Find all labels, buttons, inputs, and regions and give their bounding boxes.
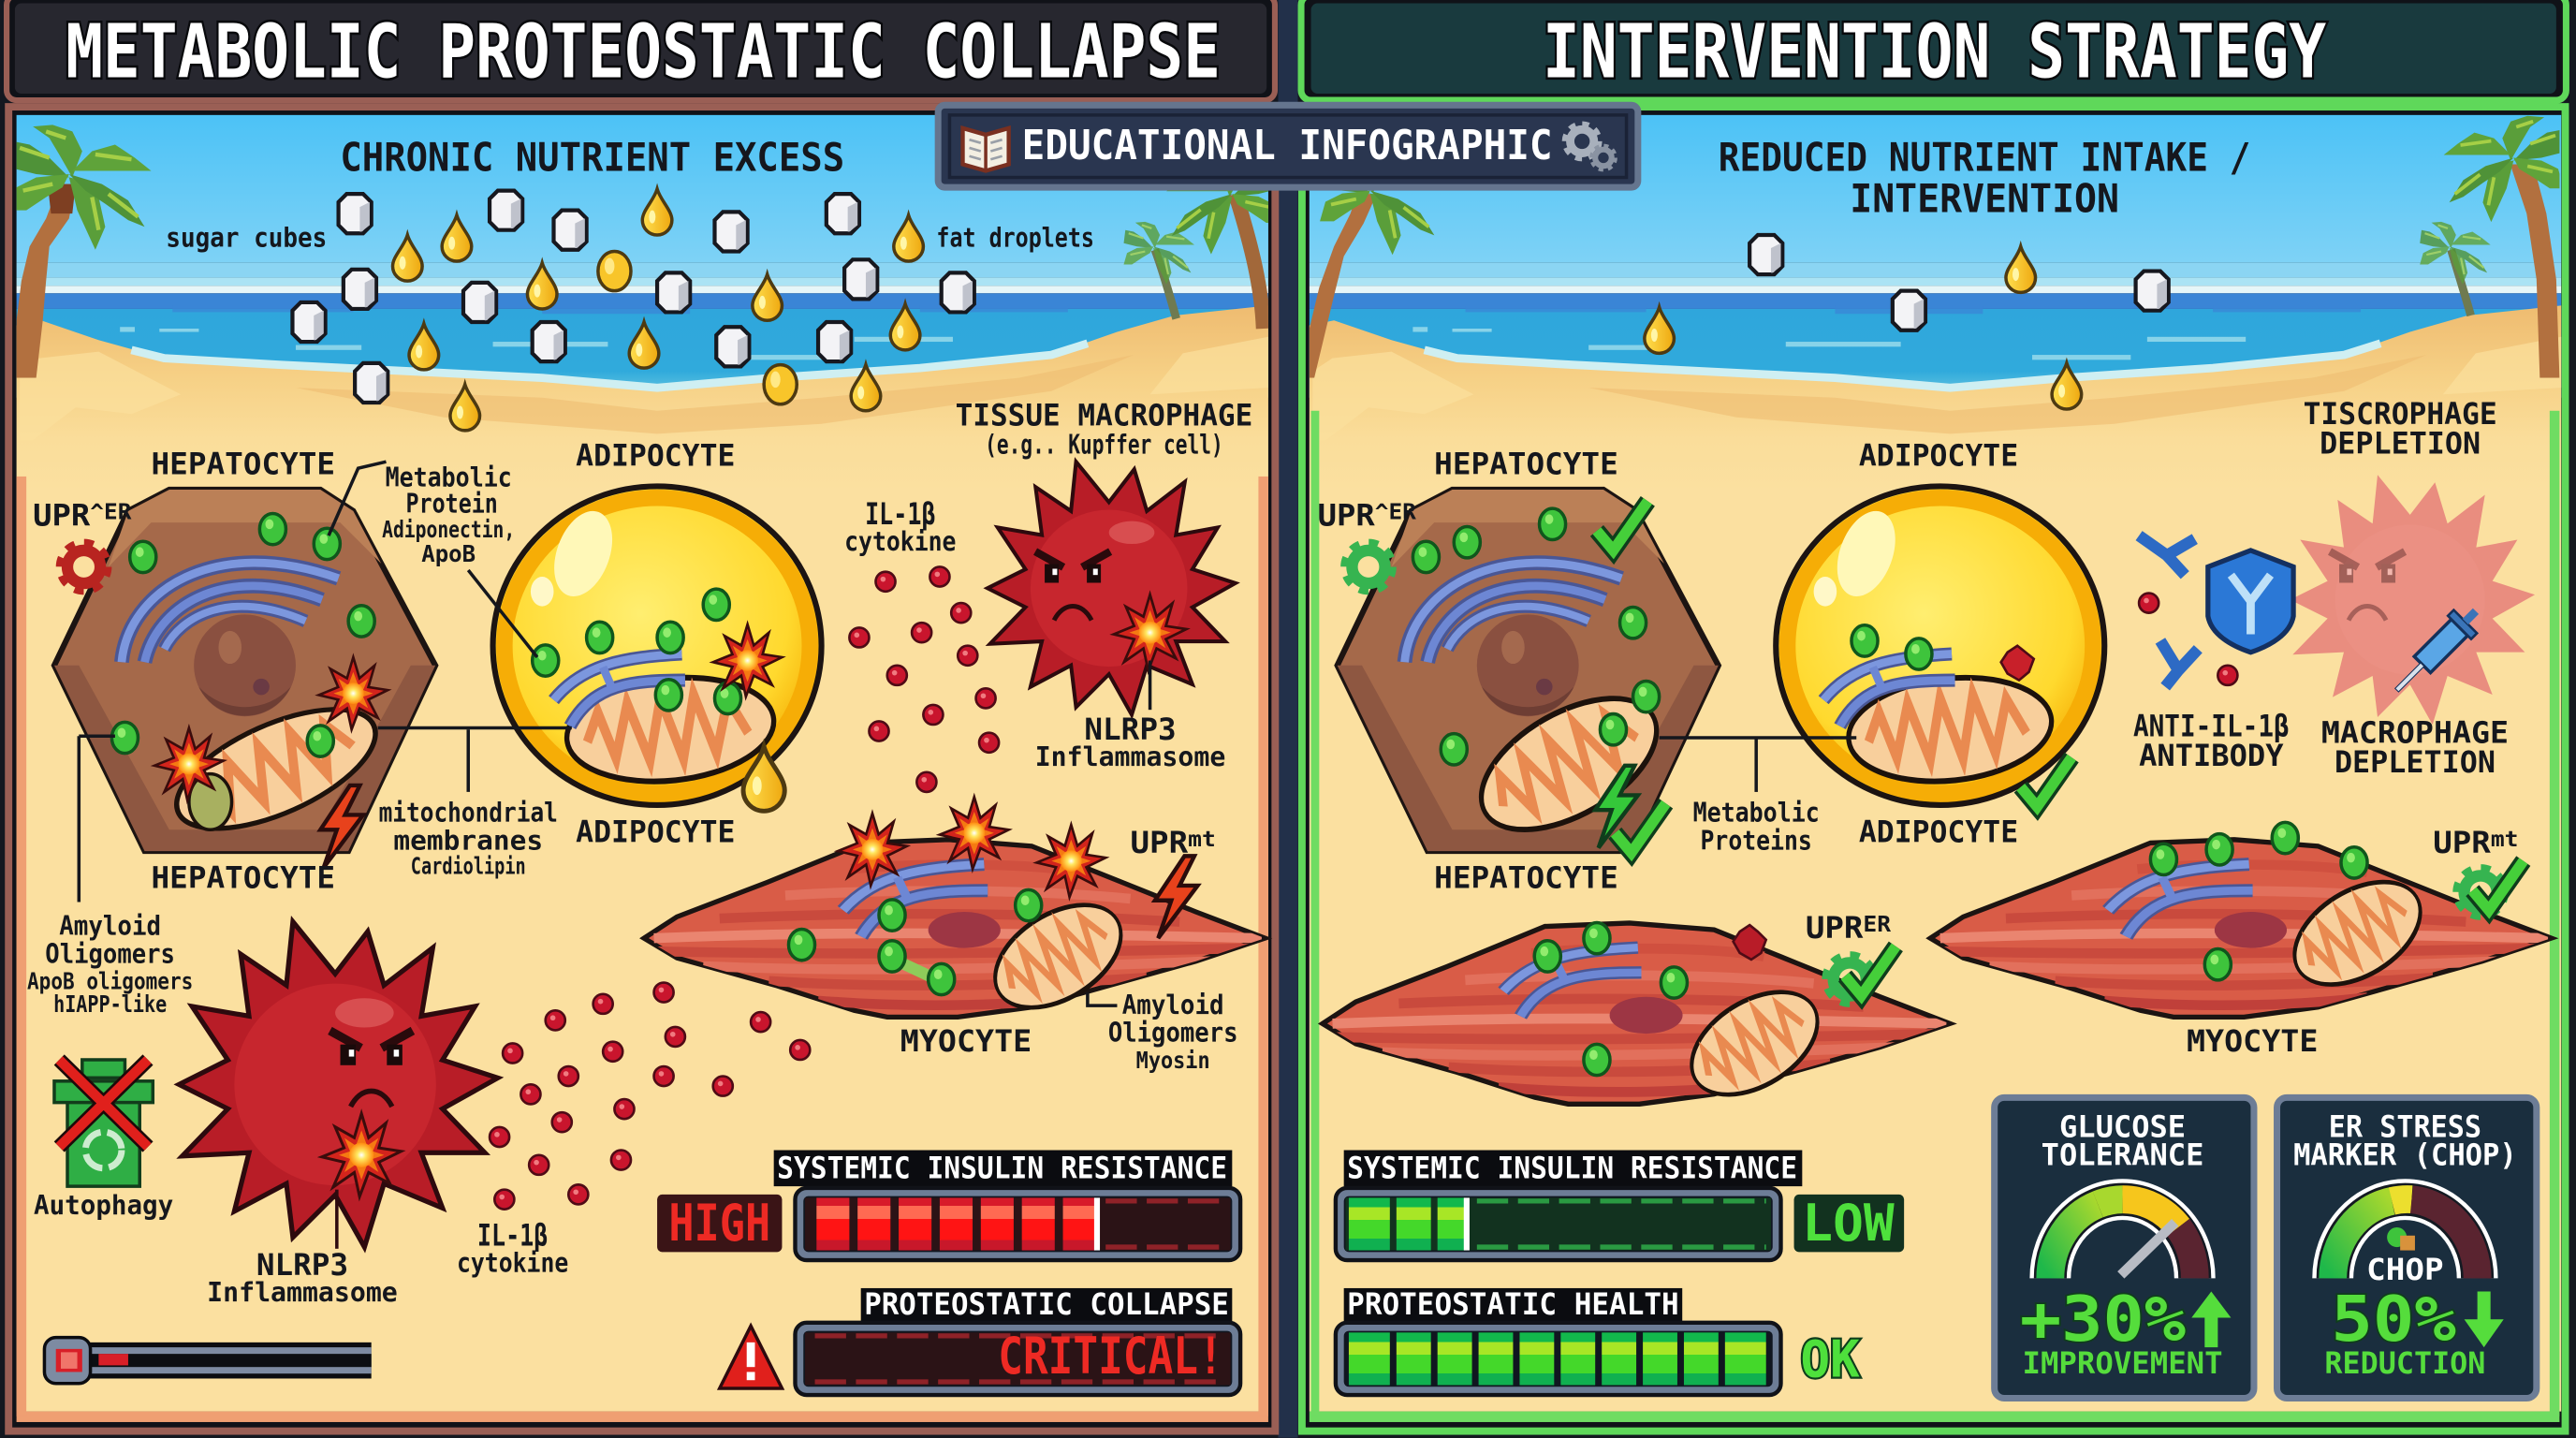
label: UPR ER lower: ER: [1863, 913, 1891, 937]
title: metabolic proteostatic collapse: METABOLIC PROTEOSTATIC COLLAPSE: [66, 8, 1221, 95]
bar: proteostatic collapse critical: [795, 1323, 1240, 1395]
label: NLRP3 inflammasome upper: Inflammasome: [1035, 741, 1225, 772]
icon: antibody shield: [2208, 550, 2293, 653]
fat droplets: [393, 189, 923, 431]
cell: myocyte (stressed): [644, 797, 1265, 1029]
label: metabolic proteins: Metabolic: [1693, 798, 1820, 829]
title bar right: [1301, 0, 2566, 100]
label: tissue macrophage: (e.g.. Kupffer cell): [985, 429, 1223, 460]
label: NLRP3 inflammasome lower: NLRP3: [256, 1249, 348, 1283]
label: reduction: REDUCTION: [2324, 1347, 2485, 1381]
cell: tissue macrophage: [988, 462, 1236, 714]
label: macrophage depletion: MACROPHAGE: [2321, 716, 2509, 750]
sugar cubes reduced: [1749, 235, 2169, 330]
label: amyloid oligomers: [27, 911, 193, 1018]
heading: reduced nutrient intake: [1719, 135, 2250, 221]
label: adipocyte bottom right: ADIPOCYTE: [1859, 815, 2018, 849]
cell: hepatocyte (stressed): [54, 490, 435, 868]
card: ER stress marker: [2277, 1097, 2537, 1399]
label: IL-1 beta cytokine lower: [457, 1219, 568, 1278]
label: UPR ER: ^ER: [90, 501, 132, 525]
label: amyloid oligomers myosin: Amyloid: [1122, 990, 1224, 1020]
label: metabolic protein: Metabolic: [386, 462, 512, 492]
sugar cubes: [292, 191, 974, 403]
value: +30%: +30%: [2020, 1283, 2186, 1356]
label: myocyte: MYOCYTE: [900, 1025, 1032, 1059]
cell: adipocyte (stressed): [493, 486, 822, 811]
heading: chronic nutrient excess: CHRONIC NUTRIENT EXCESS: [340, 135, 844, 181]
card title: GLUCOSE: [2059, 1110, 2186, 1144]
label: IL-1 beta cytokine lower: IL-1β: [477, 1219, 548, 1253]
label: mitochondrial membranes: mitochondrial: [379, 798, 558, 829]
cytokines neutralised: [2139, 594, 2237, 685]
icon: chop protein: [2387, 1227, 2415, 1251]
icon: autophagy bin crossed out: [54, 1060, 153, 1186]
tag: systemic insulin resistance high: SYSTEMIC INSULIN RESISTANCE: [777, 1152, 1227, 1185]
gauge: [2050, 1199, 2195, 1278]
heading: reduced nutrient intake: INTERVENTION: [1850, 175, 2119, 221]
label: macrophage depletion top: DEPLETION: [2320, 427, 2481, 461]
label: hepatocyte bottom right: HEPATOCYTE: [1434, 862, 1618, 896]
label: amyloid oligomers: hIAPP-like: [53, 990, 167, 1018]
title bar left: [7, 0, 1275, 100]
label: hepatocyte top: HEPATOCYTE: [152, 448, 335, 481]
label: metabolic protein: ApoB: [421, 540, 476, 567]
label: educational infographic: EDUCATIONAL INFOGRAPHIC: [1022, 122, 1553, 169]
badge: low: LOW: [1802, 1194, 1895, 1253]
card title: [2042, 1110, 2203, 1172]
badge: high: HIGH: [668, 1194, 770, 1253]
icon: green gear: [1345, 544, 1392, 590]
label: NLRP3 inflammasome upper: NLRP3: [1084, 713, 1177, 747]
label: autophagy: Autophagy: [34, 1190, 173, 1221]
label: sugar cubes: sugar cubes: [166, 222, 327, 253]
icon: book: [963, 128, 1009, 171]
panel: metabolic proteostatic collapse: [8, 107, 1280, 1431]
cell: myocyte upper (healed): [1930, 822, 2552, 1017]
label: UPR mt right: mt: [2491, 828, 2519, 852]
label: NLRP3 inflammasome lower: [207, 1249, 398, 1308]
card title: MARKER (CHOP): [2293, 1138, 2517, 1172]
small loading bar: [44, 1338, 372, 1384]
label: myocyte right: MYOCYTE: [2187, 1025, 2318, 1059]
cell: large macrophage: [179, 922, 498, 1249]
label: fat droplets: fat droplets: [936, 222, 1094, 253]
label: UPR ER right: UPR: [1318, 500, 1371, 534]
icon: warning triangle: [720, 1326, 782, 1388]
label: ok: OK: [1801, 1330, 1860, 1389]
label: amyloid oligomers myosin: Myosin: [1136, 1047, 1210, 1074]
label: tissue macrophage: [956, 400, 1252, 460]
bar: insulin resistance high: [795, 1188, 1240, 1260]
bar: proteostatic health: [1336, 1323, 1781, 1395]
label: improvement: IMPROVEMENT: [2022, 1347, 2223, 1381]
label: tissue macrophage: TISSUE MACROPHAGE: [956, 400, 1252, 433]
value: 50%: 50%: [2331, 1283, 2456, 1356]
card title: ER STRESS: [2329, 1110, 2481, 1144]
palm trees left: [10, 125, 1280, 378]
label: mitochondrial membranes: Cardiolipin: [411, 853, 526, 880]
icon: syringe: [2385, 599, 2487, 702]
cell: myocyte lower (healed): [1323, 922, 1950, 1116]
label: NLRP3 inflammasome lower: Inflammasome: [207, 1277, 398, 1308]
label: amyloid oligomers myosin: Oligomers: [1108, 1018, 1237, 1049]
label: IL-1 beta cytokine lower: cytokine: [457, 1247, 568, 1278]
label: IL-1 beta cytokine upper: IL-1β: [865, 498, 936, 532]
label: UPR mt: mt: [1188, 828, 1216, 852]
card title: [2293, 1110, 2517, 1172]
arrow up: [2191, 1291, 2231, 1347]
panel frame left: [8, 107, 1275, 1431]
tag: systemic insulin resistance low: SYSTEMIC INSULIN RESISTANCE: [1347, 1152, 1797, 1185]
label: amyloid oligomers: Amyloid: [59, 911, 161, 942]
label: IL-1 beta cytokine upper: [844, 498, 956, 557]
tag: proteostatic collapse: PROTEOSTATIC COLLAPSE: [864, 1288, 1229, 1322]
label: macrophage depletion top: [2304, 398, 2497, 461]
label: hepatocyte bottom: HEPATOCYTE: [152, 862, 335, 896]
label: UPR ER lower: UPR: [1806, 912, 1859, 946]
cytokines upper: [849, 566, 999, 792]
gauge: [2333, 1199, 2478, 1278]
badge: educational infographic: [938, 105, 1638, 187]
label: macrophage depletion top: TISCROPHAGE: [2304, 398, 2497, 432]
label: adipocyte top: ADIPOCYTE: [576, 440, 735, 474]
palm trees right: [1310, 116, 2564, 378]
label: metabolic proteins: [1693, 798, 1820, 856]
label: metabolic protein: [382, 462, 515, 567]
label: mitochondrial membranes: membranes: [393, 825, 543, 856]
label: hepatocyte top right: HEPATOCYTE: [1434, 448, 1618, 481]
label: anti IL-1 beta antibody: [2133, 710, 2290, 773]
label: amyloid oligomers: ApoB oligomers: [27, 968, 193, 995]
panel frame right: [1302, 107, 2566, 1431]
heading: reduced nutrient intake: REDUCED NUTRIENT INTAKE /: [1719, 135, 2250, 181]
label: anti IL-1 beta antibody: ANTI-IL-1β: [2133, 710, 2290, 743]
label: metabolic proteins: Proteins: [1701, 825, 1812, 856]
panel: intervention strategy: [1302, 107, 2566, 1431]
label: metabolic protein: Adiponectin,: [382, 516, 515, 543]
label: macrophage depletion: [2321, 716, 2509, 780]
label: macrophage depletion: DEPLETION: [2334, 746, 2496, 780]
label: adipocyte bottom: ADIPOCYTE: [576, 815, 735, 849]
label: anti IL-1 beta antibody: ANTIBODY: [2139, 740, 2284, 773]
label: UPR mt: UPR: [1131, 827, 1184, 860]
leader lines: [79, 462, 572, 902]
label: adipocyte top right: ADIPOCYTE: [1859, 440, 2018, 474]
label: mitochondrial membranes: [379, 798, 558, 880]
cell: depleted macrophage: [2291, 475, 2535, 725]
arrow down: [2465, 1291, 2504, 1347]
bar: insulin resistance low: [1336, 1188, 1781, 1260]
cytokines lower: [490, 983, 810, 1210]
card: glucose tolerance: [1995, 1097, 2254, 1399]
label: UPR ER: UPR: [33, 500, 86, 534]
label: metabolic protein: Protein: [406, 489, 498, 520]
label: UPR mt right: UPR: [2433, 827, 2486, 860]
cell: hepatocyte (healed): [1338, 490, 1719, 857]
label: amyloid oligomers myosin: [1108, 990, 1237, 1074]
card title: TOLERANCE: [2042, 1138, 2203, 1172]
label: IL-1 beta cytokine upper: cytokine: [844, 526, 956, 557]
bar: proteostatic collapse critical: CRITICAL!: [998, 1327, 1223, 1386]
leader lines right: [1660, 738, 1856, 792]
cell: adipocyte (healed): [1776, 486, 2104, 807]
fat droplets reduced: [1645, 246, 2082, 409]
label: UPR ER right: ^ER: [1375, 501, 1416, 525]
title: intervention strategy: INTERVENTION STRATEGY: [1543, 8, 2327, 95]
label: amyloid oligomers: Oligomers: [45, 938, 175, 969]
label: chop: CHOP: [2366, 1254, 2444, 1287]
icon: gears: [1565, 125, 1615, 169]
icon: red gear: [61, 544, 107, 590]
icon: antibodies: [2139, 536, 2198, 687]
label: NLRP3 inflammasome upper: [1035, 713, 1225, 772]
tag: proteostatic health: PROTEOSTATIC HEALTH: [1347, 1288, 1679, 1322]
